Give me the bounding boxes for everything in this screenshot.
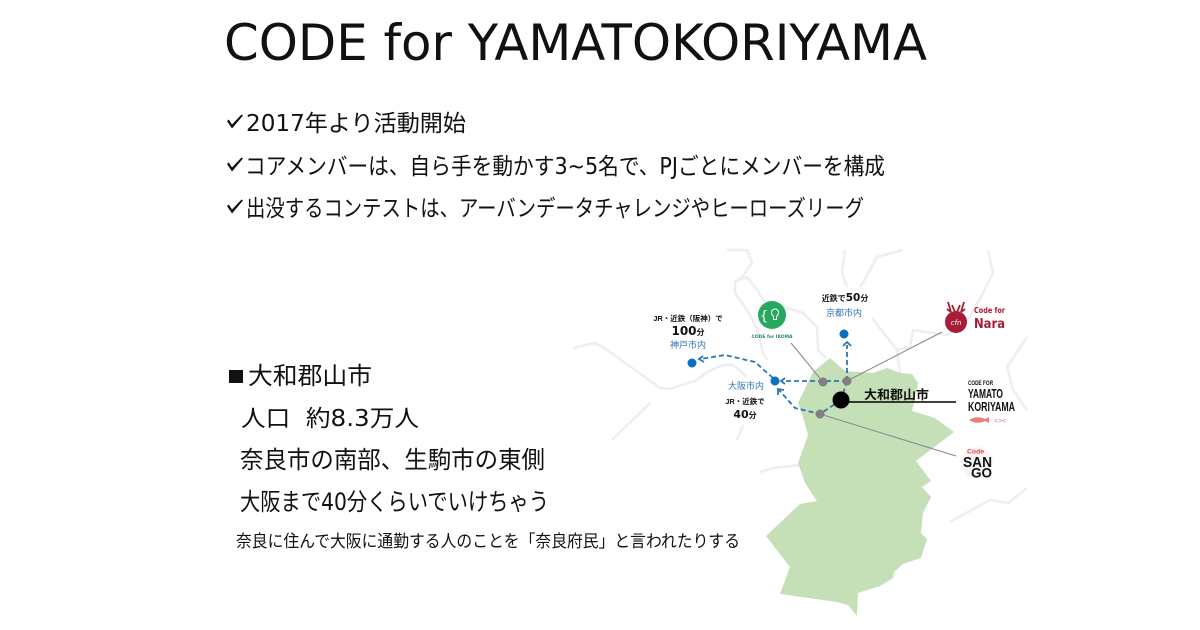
label: Kobe [653,313,723,350]
bullet list [227,111,885,222]
logo: Code for Sango: SAN [963,454,992,471]
label: Kyoto: 近鉄で50分 [822,292,868,304]
label: Kobe: JR・近鉄（阪神）で [653,313,723,323]
Yamatokoriyama marker and leader [832,392,956,408]
arrowheads [699,342,851,395]
logo: Code for Yamato Koriyama: KORIYAMA [968,400,1015,414]
label: Osaka: JR・近鉄で [725,396,765,406]
label: Osaka [725,380,765,421]
logo: Code for Ikoma [751,301,793,340]
route to Kobe [700,355,773,378]
label: Kyoto [822,292,868,318]
fact: location: 奈良市の南部、生駒市の東側 [240,446,545,474]
label: Osaka: 40分 [733,408,757,421]
logo: Code for Ikoma: { [760,309,768,324]
route to Osaka via Sango [779,390,841,414]
label: Osaka: 大阪市内 [728,380,764,391]
note: Nara-fu residents: 奈良に住んで大阪に通勤する人のことを「奈良府民」と言われたりする [236,532,740,552]
bullet: core members: コアメンバーは、自ら手を動かす3~5名で、PJごとにメンバーを構成 [245,154,885,180]
city facts text block [229,362,740,552]
logo: Code for Sango: GO [971,464,992,480]
fact: distance to Osaka: 大阪まで40分くらいでいけちゃう [240,488,549,516]
label: Yamatokoriyama city: 大和郡山市 [864,387,929,402]
label: Kyoto: 京都市内 [826,307,862,318]
title: CODE for YAMATOKORIYAMA [224,14,927,72]
destination dots [688,330,848,386]
logo: Code for Nara: Code for [974,306,1005,315]
connector lines [791,332,956,456]
logo: Code for Nara: Nara [974,317,1005,332]
logo: Code for Yamato Koriyama: <>< [994,418,1006,425]
logo: Code for Yamato Koriyama: CODE FOR [968,380,993,387]
logo: Code for Sango: Code [967,448,984,456]
logo: Code for Ikoma: CODE for IKOMA [751,334,793,340]
station dots [816,376,852,418]
bullet: contests: 出没するコンテストは、アーバンデータチャレンジやヒーローズリーグ [246,196,864,222]
route to Kyoto [846,345,848,381]
logo: Code for Nara: cfn [951,319,961,327]
logo: Code for Nara [945,302,1005,333]
bullet: started 2017: 2017年より活動開始 [246,111,466,137]
logo: Code for Yamato Koriyama [968,380,1015,425]
Yamatokoriyama city area [766,358,954,616]
rail routes [700,345,847,414]
background map lines [573,250,1027,522]
label: Kobe: 100分 [671,324,705,338]
route to Osaka [782,380,847,382]
fact: population: 人口 約8.3万人 [241,406,419,432]
heading: Yamatokoriyama: 大和郡山市 [248,362,372,390]
logo: Code for Sango [961,447,993,480]
logo: Code for Yamato Koriyama: YAMATO [968,387,1003,401]
label: Kobe: 神戸市内 [670,339,706,350]
